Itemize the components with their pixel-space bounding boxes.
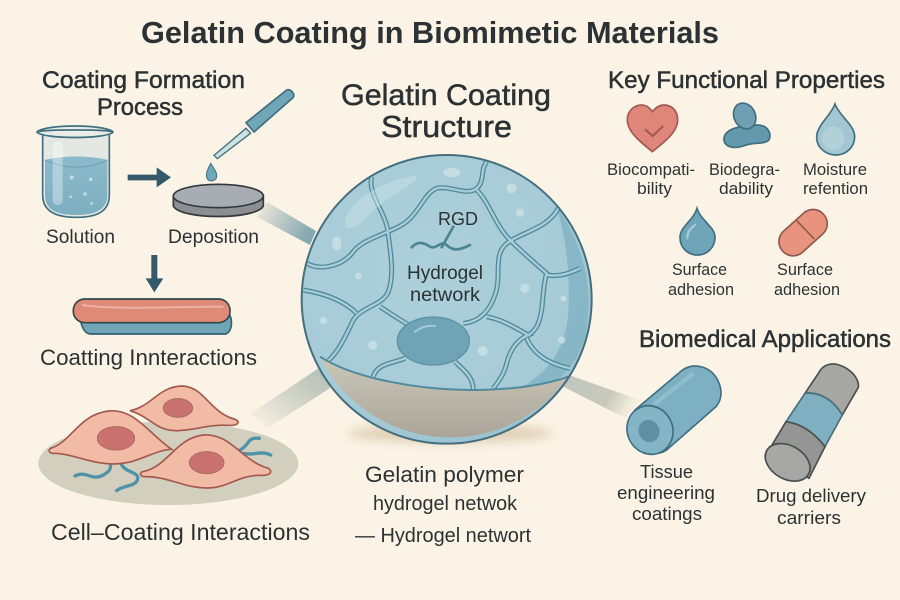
label: tissue engineering coatings [617, 461, 715, 524]
fibres [75, 438, 271, 491]
label: hydrogel network: Hydrogel [407, 262, 483, 284]
label: hydrogel network: network [410, 284, 480, 306]
heading: key functional properties: Key Functional Properties [608, 67, 885, 94]
label: moisture retention: Moisture [803, 160, 867, 179]
culture dish [38, 422, 298, 505]
label: surface adhesion right [774, 261, 840, 299]
cell: left [49, 411, 172, 464]
icon: heart with check [627, 105, 678, 152]
caption: gelatin polymer hydrogel network: — Hydrogel networt [355, 525, 531, 547]
label: biodegradability: dability [719, 179, 774, 198]
label: hydrogel network [407, 262, 483, 306]
sphere diagram [302, 155, 592, 444]
caption: gelatin polymer hydrogel network: Gelatin polymer [365, 462, 524, 487]
caption: gelatin polymer hydrogel network [355, 462, 531, 547]
heading: coating formation process [42, 67, 245, 121]
connector beam: cells to sphere [250, 366, 330, 428]
label: biocompatibility: Biocompati- [607, 160, 695, 179]
heading: coating formation process: Process [97, 94, 183, 121]
caption: gelatin polymer hydrogel network: hydrogel netwok [373, 493, 518, 515]
label: surface adhesion right: adhesion [774, 281, 840, 299]
icon: dropper [206, 90, 294, 181]
heading: gelatin coating structure [341, 79, 551, 144]
icon: water drop surface adhesion [680, 208, 715, 255]
heading: gelatin coating structure: Structure [381, 109, 512, 144]
icon: deposition disk [173, 184, 263, 216]
cell illustration [38, 386, 298, 505]
arrow: deposition to coating [146, 255, 163, 292]
heading: coating formation process: Coating Formation [42, 67, 245, 94]
label: coating interactions: Coatting Innteractions [40, 345, 257, 370]
label: biodegradability [709, 160, 780, 198]
label: RGD: RGD [438, 209, 478, 229]
label: surface adhesion left: adhesion [668, 281, 734, 299]
heading: biomedical applications: Biomedical Applications [639, 326, 891, 353]
label: tissue engineering coatings: Tissue [640, 461, 693, 482]
title: Gelatin Coating in Biomimetic Materials [141, 16, 719, 50]
icon: coated bar [73, 299, 231, 334]
sphere body [302, 155, 592, 444]
panel: gelatin coating structure [302, 79, 592, 547]
label: cell-coating interactions: Cell–Coating Interactions [51, 519, 310, 545]
panel: cell-coating interactions [38, 386, 310, 545]
label: drug delivery carriers [756, 485, 867, 528]
label: biocompatibility [607, 160, 695, 198]
label: moisture retention [803, 160, 868, 198]
cell: back [130, 386, 238, 431]
nucleus [397, 317, 469, 365]
label: surface adhesion left: Surface [672, 261, 727, 279]
grey gel base [320, 357, 568, 437]
sphere outline [302, 155, 592, 444]
arrow: solution to deposition [128, 167, 171, 187]
hydrogel network fibres [303, 162, 589, 390]
label: tissue engineering coatings: coatings [632, 503, 702, 524]
label: drug delivery carriers: carriers [777, 507, 841, 528]
panel: biomedical applications [617, 326, 891, 528]
label: moisture retention: refention [803, 179, 868, 198]
RGD peptide [412, 227, 470, 249]
label: biodegradability: Biodegra- [709, 160, 780, 179]
panel: key functional properties [607, 67, 885, 299]
label: drug delivery carriers: Drug delivery [756, 485, 867, 506]
icon: water drop moisture [817, 104, 855, 155]
icon: beaker with solution [37, 126, 113, 217]
label: deposition: Deposition [168, 227, 259, 248]
sphere shadow [347, 424, 553, 443]
connector beam: deposition to sphere [257, 202, 316, 245]
icon: tissue engineering tube [619, 366, 721, 462]
label: surface adhesion right: Surface [777, 261, 833, 279]
icon: biodegradable blobs [724, 99, 770, 147]
icon: drug delivery carrier [759, 364, 858, 489]
label: surface adhesion left [668, 261, 734, 299]
icon: capsule [773, 204, 833, 262]
label: tissue engineering coatings: engineering [617, 482, 715, 503]
panel: coating formation process [37, 67, 294, 370]
cell: right [141, 435, 271, 488]
label: solution: Solution [46, 227, 115, 248]
heading: gelatin coating structure: Gelatin Coating [341, 79, 551, 112]
label: biocompatibility: bility [637, 179, 673, 198]
connector beam: sphere to applications [560, 374, 640, 418]
